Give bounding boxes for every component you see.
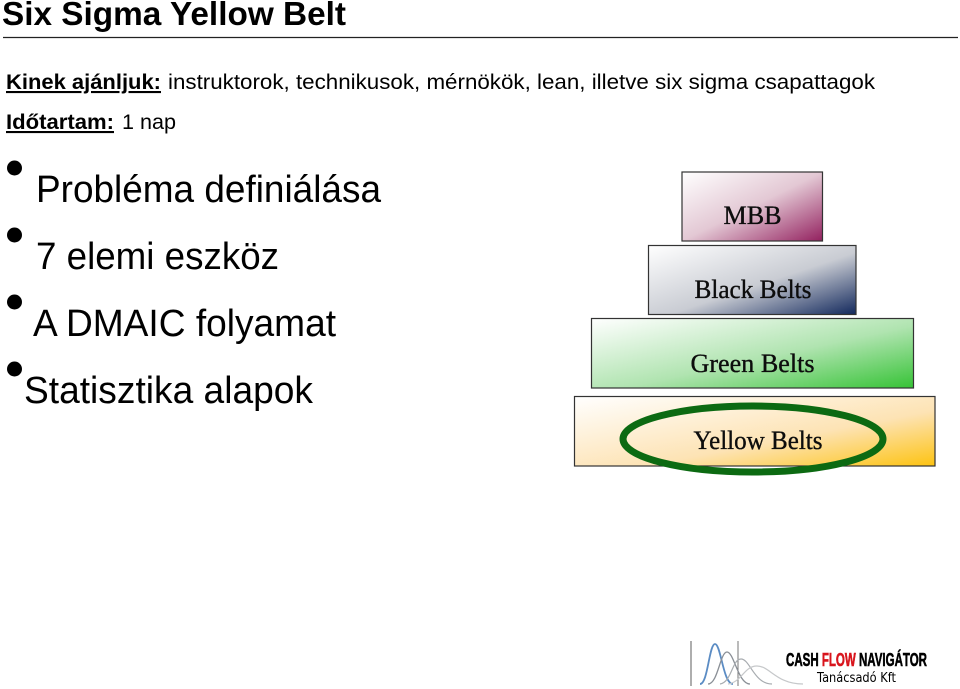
MBB tier: MBB — [724, 201, 782, 230]
Yellow Belts tier: Yellow Belts — [694, 426, 822, 455]
Black Belts tier: Black Belts — [694, 275, 812, 304]
bullet list — [7, 160, 382, 412]
audience text: Kinek ajánljuk: — [6, 71, 161, 94]
MBB tier — [682, 172, 822, 241]
duration text — [6, 111, 176, 134]
duration text: 1 nap — [122, 111, 176, 134]
bullet list: Statisztika alapok — [24, 370, 314, 412]
logo: Cash Flow Navigator — [691, 641, 927, 686]
Black Belts tier — [648, 246, 856, 314]
logo icon: distribution curves — [691, 641, 803, 686]
logo subtitle: Tanácsadó Kft — [816, 671, 896, 686]
belt pyramid — [574, 172, 935, 472]
audience text: instruktorok, technikusok, mérnökök, lean, illetve six sigma csapattagok — [168, 71, 876, 94]
bullet list: A DMAIC folyamat — [33, 303, 336, 345]
bullet list: 7 elemi eszköz — [36, 236, 279, 278]
highlight ellipse — [623, 406, 883, 472]
duration text: Időtartam: — [6, 111, 114, 134]
Yellow Belts tier — [574, 396, 935, 466]
bullet list: Probléma definiálása — [36, 169, 382, 211]
Green Belts tier: Green Belts — [690, 349, 814, 378]
Green Belts tier — [592, 318, 914, 388]
